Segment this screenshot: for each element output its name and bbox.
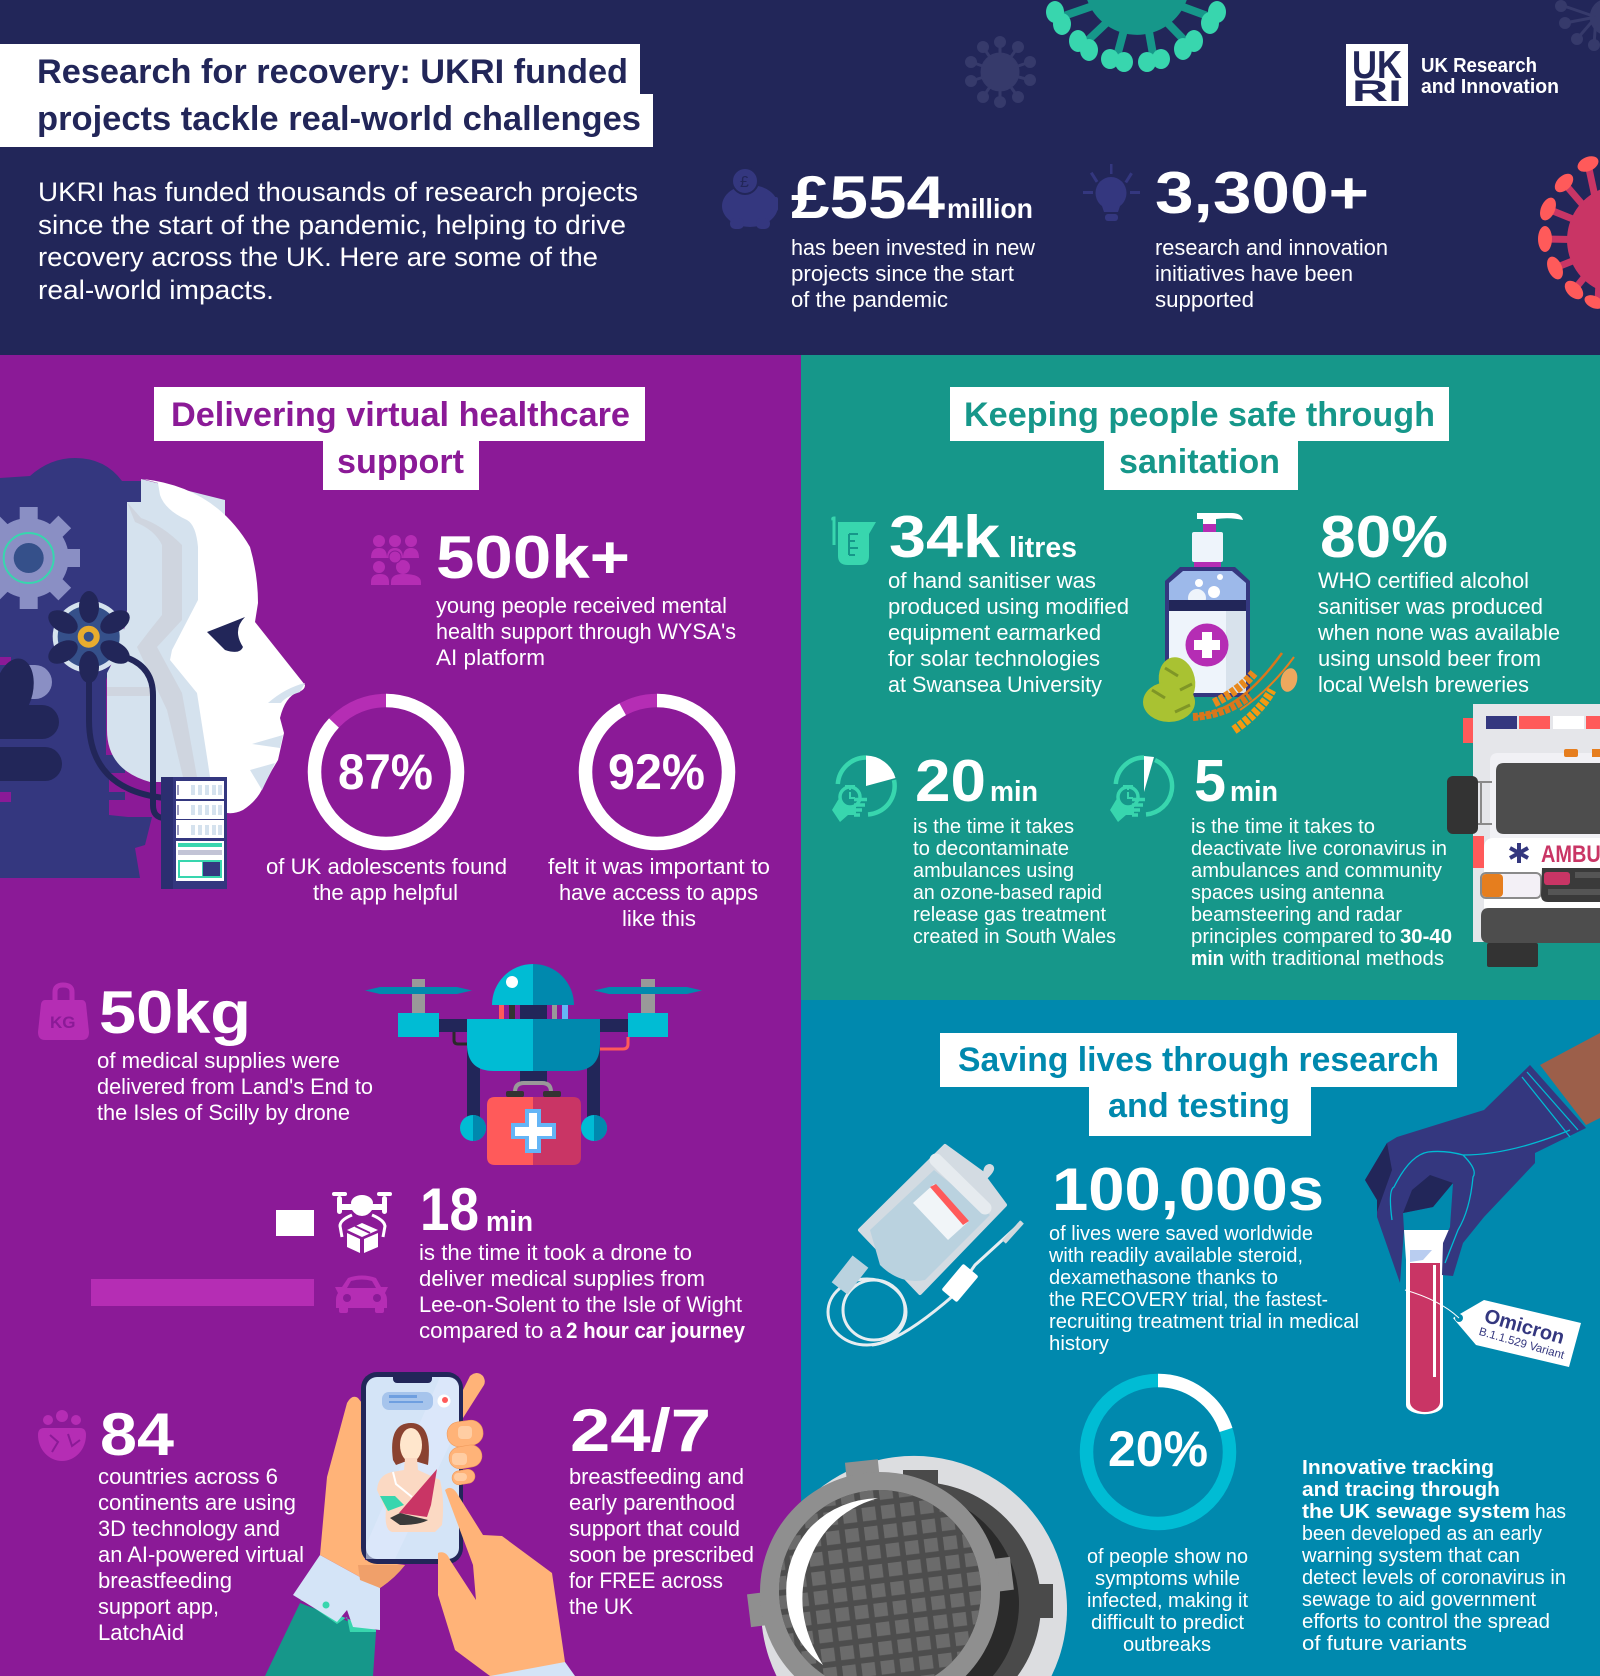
- caption: 20%: [1087, 1545, 1248, 1656]
- stat: 20 min: release gas treatment: [913, 904, 1106, 926]
- stat: 24/7: soon be prescribed: [569, 1542, 754, 1567]
- caption: 87%: [266, 854, 507, 905]
- text: sewage tracking: [1301, 1456, 1566, 1655]
- stat: 24/7: breastfeeding and: [569, 1464, 744, 1489]
- panel: sanitation: [801, 355, 1600, 1000]
- stat: 5 min: is the time it takes to: [1191, 816, 1375, 838]
- stat: 500k+: [436, 524, 736, 670]
- stat: 24/7: early parenthood: [569, 1490, 735, 1515]
- stat: 554 million: [791, 164, 1036, 312]
- icon: stopwatch 20 min: [832, 756, 896, 822]
- icon: dim virus top right: [1556, 0, 1600, 50]
- heading: research: Saving lives through research: [958, 1041, 1439, 1079]
- stat: 20 min: an ozone-based rapid: [913, 882, 1102, 904]
- stat: 20 min: [913, 748, 1116, 948]
- stat: 34k litres: for solar technologies: [888, 646, 1100, 671]
- stat: 5 min: [1191, 748, 1452, 970]
- stat: 20 min: min: [990, 776, 1038, 808]
- text: sewage tracking: of future variants: [1302, 1632, 1467, 1655]
- stat: 24/7: the UK: [569, 1594, 633, 1619]
- stat: 500k+: 500k+: [436, 524, 630, 591]
- icon: dim virus: [966, 36, 1036, 108]
- stat: 84: an AI-powered virtual: [98, 1542, 304, 1567]
- heading: healthcare: support: [337, 443, 464, 481]
- stat: 24/7: support that could: [569, 1516, 740, 1541]
- caption: 92%: have access to apps: [559, 880, 758, 905]
- text: sewage tracking: efforts to control the spread: [1302, 1610, 1550, 1633]
- stat: 80%: sanitiser was produced: [1318, 594, 1543, 619]
- stat: 34k litres: equipment earmarked: [888, 620, 1101, 645]
- intro text: [38, 177, 638, 305]
- panel: header: [0, 0, 1600, 356]
- stat: 84: LatchAid: [98, 1620, 184, 1645]
- title: [0, 44, 653, 147]
- caption: 92%: [548, 854, 770, 931]
- stat: 5 min: 30-40: [1400, 926, 1452, 948]
- icon: KG weight: KG: [50, 1013, 76, 1032]
- stat: 84: 3D technology and: [98, 1516, 280, 1541]
- stat: 34k litres: at Swansea University: [888, 672, 1103, 697]
- stat: 554 million: has been invested in new: [791, 235, 1036, 260]
- intro text: recovery across the UK. Here are some of the: [38, 242, 598, 272]
- stat: 84: countries across 6: [98, 1464, 278, 1489]
- stat: 5 min: spaces using antenna: [1191, 882, 1385, 904]
- illustration: ambulance: [1447, 704, 1600, 967]
- stat: 18 min: deliver medical supplies from: [419, 1266, 705, 1291]
- text: sewage tracking: and tracing through: [1302, 1478, 1500, 1501]
- stat: 5 min: beamsteering and radar: [1191, 904, 1402, 926]
- stat: 84: [98, 1401, 304, 1645]
- icon: piggy bank: [722, 168, 778, 229]
- illustration: test tube and glove: B.1.1.529 Variant: [1477, 1326, 1566, 1362]
- stat: 80%: 80%: [1320, 504, 1448, 570]
- logo: UKRI: RI: [1352, 75, 1402, 108]
- logo: UKRI: [1346, 44, 1559, 108]
- stat: 34k litres: of hand sanitiser was: [888, 568, 1096, 593]
- illustration: drone: [365, 964, 702, 1165]
- logo: UKRI: and Innovation: [1421, 76, 1559, 98]
- intro text: UKRI has funded thousands of research projects: [38, 177, 638, 207]
- text: sewage tracking: has: [1535, 1500, 1566, 1523]
- icon: stopwatch 5 min: [1110, 756, 1172, 822]
- text: sewage tracking: detect levels of coronavirus in: [1302, 1566, 1566, 1589]
- icon: beaker: [833, 518, 876, 565]
- caption: 20%: infected, making it: [1087, 1589, 1248, 1612]
- stat: 80%: when none was available: [1317, 620, 1560, 645]
- stat: 500k+: young people received mental: [436, 593, 727, 618]
- icon: KG weight: [38, 985, 89, 1040]
- text: sewage tracking: sewage to aid government: [1302, 1588, 1536, 1611]
- heading: research: [940, 1033, 1457, 1136]
- title: projects tackle real-world challenges: [37, 100, 641, 138]
- stat: 100,000s: the RECOVERY trial, the fastest-: [1049, 1288, 1328, 1311]
- stat: 20 min: created in South Wales: [913, 926, 1116, 948]
- illustration: manhole: [747, 1456, 1067, 1676]
- illustration: test tube and glove: Omicron: [1482, 1305, 1567, 1349]
- heading: sanitation: [950, 387, 1449, 490]
- stat: 3,300+: [1155, 160, 1388, 312]
- stat: 554 million: million: [947, 193, 1033, 224]
- stat: 5 min: min: [1230, 776, 1278, 808]
- stat: 20 min: 20: [915, 748, 986, 814]
- stat: 80%: using unsold beer from: [1318, 646, 1541, 671]
- bar: car time: [91, 1279, 314, 1306]
- panel: virtual healthcare: [0, 355, 801, 1676]
- stat: 80%: [1317, 504, 1560, 697]
- heading: sanitation: Keeping people safe through: [964, 396, 1435, 434]
- icon: people group: [371, 535, 421, 585]
- text: sewage tracking: the UK sewage system: [1302, 1500, 1530, 1523]
- ring chart: 92%: 92%: [608, 744, 705, 800]
- text: sewage tracking: been developed as an early: [1302, 1522, 1543, 1545]
- illustration: test tube and glove: [1365, 1033, 1600, 1414]
- stat: 5 min: min: [1191, 948, 1224, 970]
- logo: UKRI: UK: [1352, 44, 1402, 87]
- stat: 18 min: 2 hour car journey: [566, 1318, 745, 1343]
- illustration: IV bag: [828, 1146, 1022, 1345]
- ring chart: 20%: 20%: [1108, 1421, 1208, 1477]
- stat: 34k litres: 34k: [889, 504, 1000, 570]
- stat: 24/7: 24/7: [570, 1397, 711, 1464]
- caption: 20%: of people show no: [1087, 1545, 1248, 1568]
- heading: healthcare: [154, 387, 645, 490]
- bar: drone time: [276, 1210, 314, 1236]
- stat: 34k litres: [888, 504, 1129, 697]
- caption: 20%: difficult to predict: [1091, 1611, 1244, 1634]
- stat: 24/7: [569, 1397, 754, 1619]
- ring chart: 87%: [314, 700, 458, 844]
- stat: 84: breastfeeding: [98, 1568, 232, 1593]
- stat: 80%: local Welsh breweries: [1318, 672, 1529, 697]
- caption: 20%: outbreaks: [1123, 1633, 1211, 1656]
- stat: 554 million: of the pandemic: [791, 287, 948, 312]
- stat: 5 min: 5: [1194, 748, 1226, 814]
- stat: 18 min: is the time it took a drone to: [419, 1240, 692, 1265]
- stat: 5 min: deactivate live coronavirus in: [1191, 838, 1447, 860]
- intro text: since the start of the pandemic, helping to drive: [38, 210, 626, 240]
- stat: 100,000s: history: [1049, 1332, 1110, 1355]
- stat: 80%: WHO certified alcohol: [1318, 568, 1529, 593]
- panel: research and testing: [747, 1000, 1600, 1676]
- stat: 3,300+: 3,300+: [1155, 160, 1369, 226]
- stat: 5 min: principles compared to: [1191, 926, 1396, 948]
- caption: 20%: symptoms while: [1095, 1567, 1240, 1590]
- heading: healthcare: Delivering virtual healthcare: [171, 396, 630, 434]
- stat: 100,000s: with readily available steroid,: [1048, 1244, 1303, 1267]
- stat: 5 min: ambulances and community: [1191, 860, 1442, 882]
- stat: 3,300+: initiatives have been: [1155, 261, 1353, 286]
- stat: 500k+: AI platform: [436, 645, 545, 670]
- icon: people on globe: [38, 1410, 86, 1461]
- stat: 34k litres: litres: [1009, 532, 1077, 564]
- stat: 100,000s: 100,000s: [1052, 1156, 1324, 1223]
- intro text: real-world impacts.: [38, 275, 274, 305]
- caption: 92%: like this: [622, 906, 696, 931]
- icon: car: [335, 1276, 388, 1313]
- icon: piggy bank: £: [740, 174, 749, 191]
- stat: 100,000s: recruiting treatment trial in medical: [1049, 1310, 1359, 1333]
- stat: 18 min: min: [486, 1206, 533, 1238]
- illustration: hands holding phone: [265, 1372, 575, 1676]
- stat: 554 million: projects since the start: [791, 261, 1015, 286]
- stat: 100,000s: of lives were saved worldwide: [1049, 1222, 1313, 1245]
- caption: 92%: felt it was important to: [548, 854, 770, 879]
- illustration: robot head: [0, 458, 305, 889]
- stat: 18 min: [419, 1176, 745, 1343]
- stat: 500k+: health support through WYSA's: [436, 619, 736, 644]
- stat: 24/7: for FREE across: [569, 1568, 723, 1593]
- stat: 84: 84: [100, 1401, 175, 1468]
- ring chart: 87%: 87%: [338, 744, 433, 800]
- stat: 100,000s: [1048, 1156, 1359, 1355]
- caption: 87%: of UK adolescents found: [266, 854, 507, 879]
- stat: 50kg: delivered from Land's End to: [97, 1074, 373, 1099]
- stat: 20 min: is the time it takes: [913, 816, 1074, 838]
- caption: 87%: the app helpful: [313, 880, 458, 905]
- stat: 50kg: [97, 979, 373, 1125]
- icon: red virus: [1537, 153, 1600, 312]
- illustration: sanitiser and hops: [1143, 513, 1300, 730]
- stat: 50kg: the Isles of Scilly by drone: [97, 1100, 350, 1125]
- stat: 18 min: 18: [420, 1176, 479, 1243]
- stat: 554 million: £554: [791, 164, 946, 231]
- stat: 84: continents are using: [98, 1490, 296, 1515]
- icon: light bulb: [1083, 164, 1140, 221]
- logo: UKRI: UK Research: [1421, 55, 1537, 77]
- stat: 84: support app,: [98, 1594, 219, 1619]
- heading: sanitation: sanitation: [1119, 443, 1280, 481]
- heading: research: and testing: [1108, 1087, 1290, 1125]
- ring chart: 92%: [586, 700, 728, 844]
- stat: 3,300+: supported: [1155, 287, 1254, 312]
- stat: 20 min: ambulances using: [913, 860, 1074, 882]
- text: sewage tracking: warning system that can: [1301, 1544, 1520, 1567]
- ring chart: 20%: [1086, 1380, 1230, 1524]
- stat: 50kg: 50kg: [99, 979, 251, 1046]
- text: sewage tracking: Innovative tracking: [1302, 1456, 1494, 1479]
- icon: teal virus: [1046, 0, 1226, 72]
- stat: 3,300+: research and innovation: [1155, 235, 1388, 260]
- stat: 100,000s: dexamethasone thanks to: [1049, 1266, 1278, 1289]
- stat: 18 min: Lee-on-Solent to the Isle of Wight: [419, 1292, 743, 1317]
- stat: 20 min: to decontaminate: [913, 838, 1069, 860]
- stat: 5 min: with traditional methods: [1229, 948, 1444, 970]
- stat: 18 min: compared to a: [419, 1318, 562, 1343]
- title: Research for recovery: UKRI funded: [37, 53, 628, 91]
- icon: drone with parcel: [332, 1192, 392, 1253]
- stat: 50kg: of medical supplies were: [97, 1048, 340, 1073]
- stat: 34k litres: produced using modified: [888, 594, 1129, 619]
